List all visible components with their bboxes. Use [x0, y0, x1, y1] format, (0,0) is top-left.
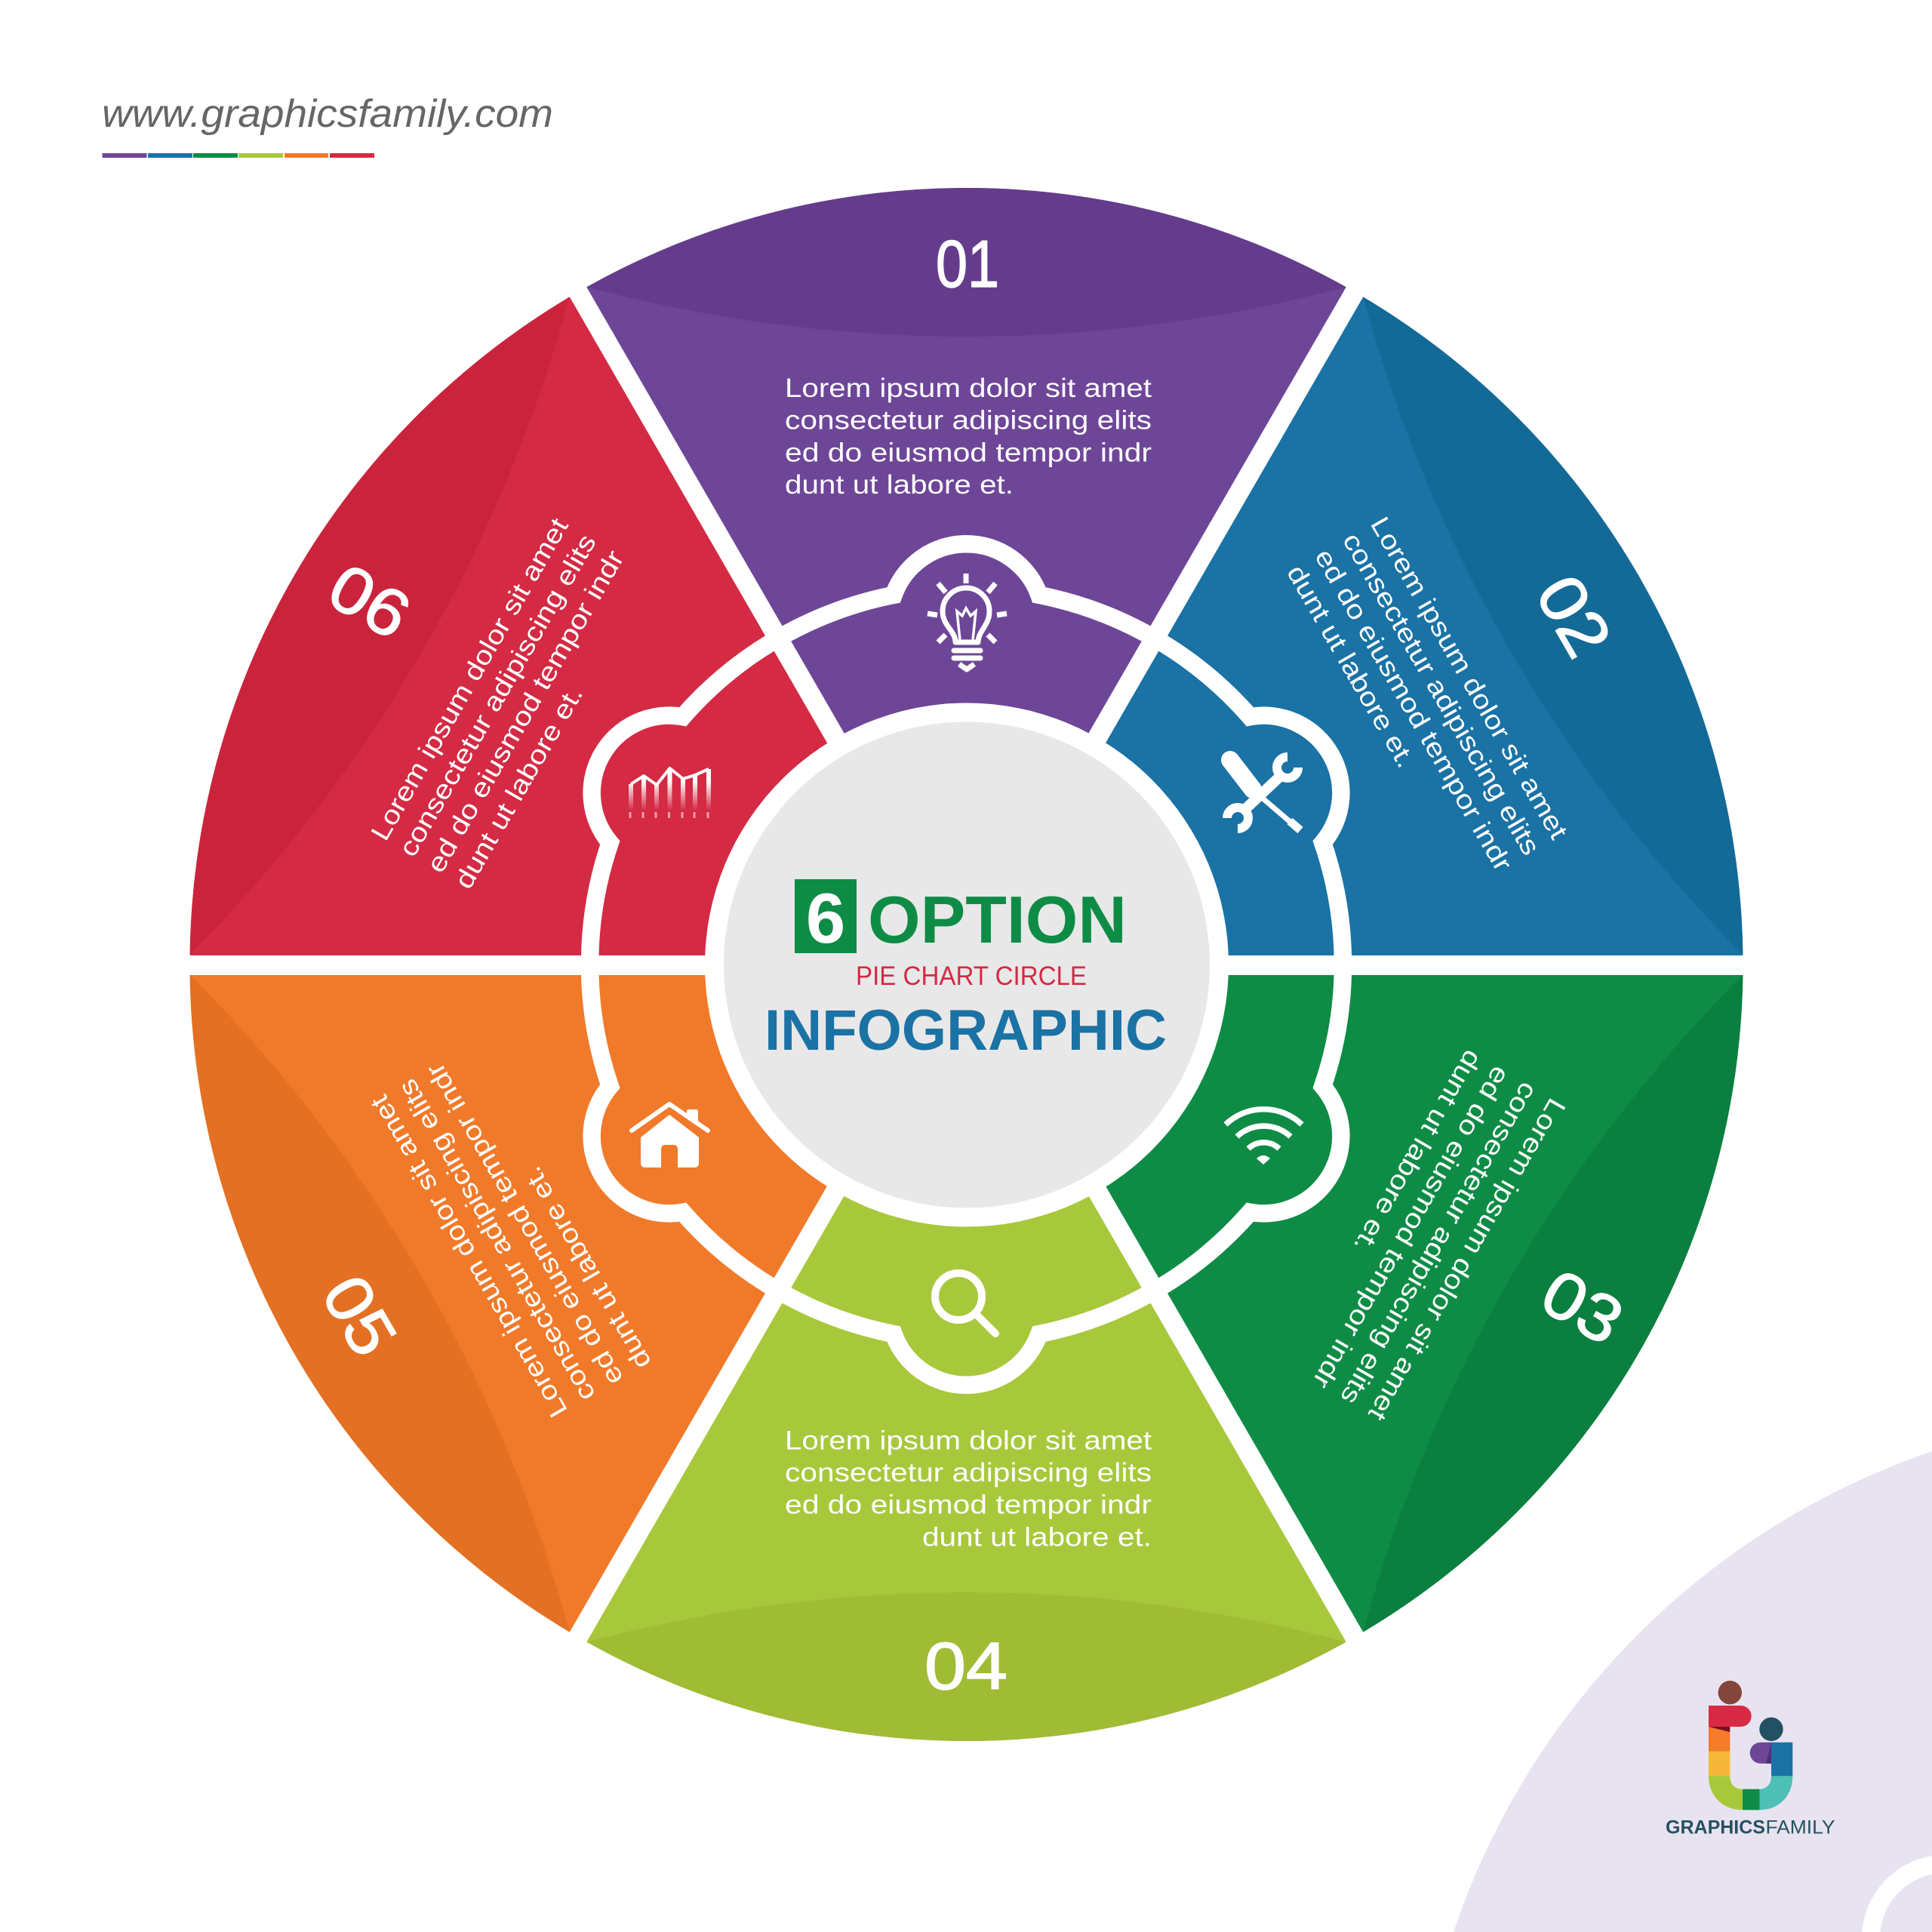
subtitle: PIE CHART CIRCLE: [856, 961, 1087, 991]
panel: 06 red: [100, 240, 1161, 1301]
text block 04: consectetur adipiscing elits: [785, 1458, 1152, 1487]
icon: tools: [1227, 757, 1300, 830]
number 01: 01: [936, 226, 999, 301]
colour strip under url: [103, 153, 374, 158]
logo wordmark: GRAPHICS: [1666, 1817, 1765, 1838]
text block 04: ed do eiusmod tempor indr: [785, 1491, 1152, 1520]
text block 02: dunt ut labore et.: [1281, 560, 1421, 773]
text block 03: dunt ut labore et.: [1348, 1045, 1487, 1258]
title block: [764, 878, 1167, 1063]
text block 05: [365, 1041, 657, 1423]
text block 06: dunt ut labore et.: [449, 681, 589, 894]
text block 06: Lorem ipsum dolor sit amet: [365, 513, 574, 845]
text block 05: dunt ut labore et.: [517, 1161, 657, 1374]
text block 03: [1278, 1045, 1571, 1426]
text block 04: [785, 1426, 1152, 1552]
number 6 badge: 6: [806, 878, 845, 958]
text block 04: Lorem ipsum dolor sit amet: [785, 1426, 1152, 1455]
icon: light bulb: [928, 574, 1007, 669]
text block 01: [785, 374, 1152, 500]
text block 02: Lorem ipsum dolor sit amet: [1364, 512, 1574, 844]
text block 05: ed do eiusmod tempor indr: [420, 1057, 629, 1390]
website url heading: www.graphicsfamily.com: [102, 92, 553, 136]
text block 06: ed do eiusmod tempor indr: [421, 545, 630, 878]
icon: wifi: [1226, 1109, 1302, 1164]
text block 06: consectetur adipiscing elits: [393, 529, 602, 862]
text block 03: Lorem ipsum dolor sit amet: [1362, 1094, 1571, 1426]
number 02: 02: [1521, 563, 1626, 669]
panel: 02 blue: [772, 240, 1833, 1301]
centre circle: [705, 703, 1229, 1227]
number 05: 05: [308, 1263, 411, 1368]
number 03: 03: [1529, 1254, 1635, 1359]
panel: 01 purple: [578, 188, 1355, 964]
decorative corner: lavender circle: [1454, 1451, 1932, 1932]
panel: 05 orange: [100, 628, 1161, 1689]
icon: house: [632, 1104, 708, 1168]
number 6 badge: [795, 878, 857, 958]
text block 02: ed do eiusmod tempor indr: [1309, 544, 1518, 877]
text block 01: consectetur adipiscing elits: [785, 406, 1152, 435]
logo: graphics family: [1666, 1681, 1835, 1838]
text block 01: dunt ut labore et.: [785, 470, 1014, 500]
text block 05: consectetur adipiscing elits: [392, 1074, 601, 1406]
panel: 03 green: [772, 628, 1833, 1689]
text block 05: Lorem ipsum dolor sit amet: [365, 1090, 574, 1423]
title: INFOGRAPHIC: INFOGRAPHIC: [764, 998, 1167, 1063]
text block 01: Lorem ipsum dolor sit amet: [785, 374, 1152, 403]
text block 04: dunt ut labore et.: [922, 1522, 1152, 1552]
logo wordmark: [1666, 1817, 1835, 1838]
number 06: 06: [316, 549, 423, 654]
text block 03: consectetur adipiscing elits: [1334, 1077, 1543, 1410]
text block 01: ed do eiusmod tempor indr: [785, 438, 1152, 467]
white gaps between sectors: [178, 281, 1755, 1647]
text block 06: [365, 513, 658, 894]
title: OPTION: OPTION: [868, 882, 1127, 957]
icon: line and bar chart: [629, 768, 711, 818]
text block 02: [1281, 512, 1574, 893]
icon: magnifier: [935, 1273, 995, 1334]
text block 03: ed do eiusmod tempor indr: [1306, 1061, 1515, 1394]
text block 02: consectetur adipiscing elits: [1337, 528, 1546, 860]
panel: 04 lime: [578, 964, 1355, 1741]
number 04: 04: [924, 1629, 1008, 1703]
logo wordmark: FAMILY: [1766, 1817, 1835, 1838]
